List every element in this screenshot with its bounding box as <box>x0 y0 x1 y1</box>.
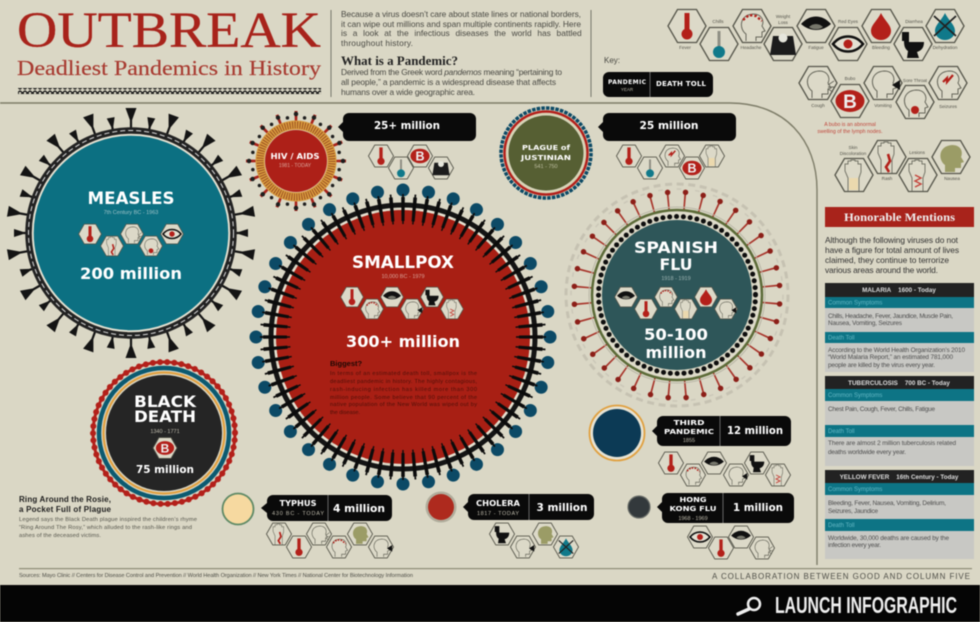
card: yellow fever: YELLOW FEVER 16th Century - Today <box>840 474 959 481</box>
virus: measles <box>7 108 255 358</box>
intro text: throughout history. <box>341 38 413 48</box>
virus: smallpox <box>256 190 550 484</box>
measles death toll: 200 million <box>80 264 182 283</box>
pill: hong kong flu: 1 million <box>733 502 783 514</box>
symptom labels: Fatigue <box>808 45 824 50</box>
smallpox note text: million people. Some believe that 90 percent of the <box>330 395 477 401</box>
smallpox heading: SMALLPOX <box>352 253 454 273</box>
black death dates: 1340 - 1771 <box>150 429 180 435</box>
symptom labels: Lesions <box>909 150 926 155</box>
subtitle: Deadliest Pandemics in History <box>17 56 322 80</box>
ornament band <box>18 88 321 94</box>
justinian symptoms <box>616 145 725 179</box>
card: malaria: According to the World Health Organization’s 2010 <box>828 347 965 354</box>
typhus symptoms <box>266 523 394 558</box>
black death heading <box>134 392 197 426</box>
black death death toll: 75 million <box>136 464 194 476</box>
key: Key: <box>604 56 620 65</box>
symptom labels: Diarrhea <box>905 19 923 24</box>
justinian heading <box>520 144 571 162</box>
icon: lesions <box>899 158 937 192</box>
justinian heading: PLAGUE of <box>522 144 571 152</box>
icon: vomiting <box>864 66 902 100</box>
key pill: DEATH TOLL <box>656 80 707 88</box>
pill: cholera: CHOLERA <box>476 499 520 508</box>
measles heading: MEASLES <box>88 189 174 209</box>
pill: hong kong flu <box>657 493 794 523</box>
symptom labels: Nausea <box>944 176 960 181</box>
honorable mentions heading <box>825 207 974 227</box>
justinian dates: 541 - 750 <box>534 164 558 170</box>
card: tuberculosis <box>825 376 974 466</box>
pill: third pandemic: 1855 <box>683 438 695 444</box>
card: malaria: Chills, Headache, Fever, Jaundice, Muscle Pain, <box>828 313 953 320</box>
smallpox note text: native population of the New World was wiped out by <box>330 402 477 408</box>
icon: bubo <box>831 84 869 118</box>
pill: cholera <box>463 494 594 520</box>
symptom labels <box>679 14 960 181</box>
card: yellow fever: Death Toll <box>828 523 855 529</box>
icon: fever <box>668 10 706 42</box>
symptom legend icons <box>668 10 970 192</box>
smallpox symptoms <box>341 287 463 319</box>
honorable mentions intro: Although the following viruses do not <box>825 235 959 245</box>
symptom labels: Skin <box>849 145 858 150</box>
virus: cholera <box>426 492 456 522</box>
icon: seizures <box>929 66 967 100</box>
icon: red eyes <box>829 28 867 60</box>
third pandemic symptoms <box>658 452 791 486</box>
intro text: is a look at the infectious diseases the world has battled <box>341 28 582 38</box>
hiv heading: HIV / AIDS <box>270 152 320 161</box>
pill: typhus <box>261 495 392 521</box>
smallpox note text: rash-inducing infection has killed more than 300 <box>330 387 477 393</box>
icon: bubo: B <box>161 441 170 455</box>
callout: ring around the rosie <box>19 495 197 539</box>
smallpox note text: deadliest pandemic in history. The highly contagious, <box>330 379 477 385</box>
card: yellow fever: infection every year. <box>828 542 881 549</box>
smallpox dates: 10,000 BC - 1979 <box>381 274 425 280</box>
symptom labels: Fever <box>679 45 691 50</box>
icon: cough <box>799 66 837 100</box>
icon: magnifier <box>738 598 760 614</box>
smallpox note text <box>330 371 477 416</box>
sources: Sources: Mayo Clinic // Centers for Disease Control and Prevention // World Health Organization // New York Times // National Center for Biotechnology Information <box>19 573 413 579</box>
pill: third pandemic: PANDEMIC <box>664 428 714 436</box>
hong kong flu symptoms <box>687 526 775 559</box>
icon: fatigue <box>797 10 835 42</box>
pill: hong kong flu: 1968 - 1969 <box>678 516 708 522</box>
callout: ring around the rosie: ashes of the deceased victims. <box>19 533 101 539</box>
honorable mentions intro: various areas around the world. <box>825 265 938 275</box>
symptom labels: Vomiting <box>874 103 892 108</box>
card: yellow fever: Seizures, Jaundice <box>828 508 878 515</box>
icon: weight loss <box>764 28 802 60</box>
callout: ring around the rosie: Ring Around the Rosie, <box>19 495 111 504</box>
honorable mentions intro <box>825 235 959 275</box>
title: OUTBREAK <box>17 3 321 59</box>
card: malaria: Nausea, Vomiting, Seizures <box>828 320 902 327</box>
death toll pill: justinian: 25 million <box>640 120 698 132</box>
bubo note: swelling of the lymph nodes. <box>817 129 883 135</box>
credit: A COLLABORATION BETWEEN GOOD AND COLUMN FIVE <box>712 572 970 581</box>
hiv symptoms: B <box>415 150 425 164</box>
definition text: Derived from the Greek word pandemos meaning “pertaining to <box>341 67 562 77</box>
intro text: Because a virus doesn’t care about state lines or national borders, <box>341 9 581 19</box>
symptom labels: Loss <box>778 20 789 25</box>
pill: hong kong flu: KONG FLU <box>670 505 717 513</box>
card: tuberculosis: Common Symptoms <box>828 393 882 399</box>
smallpox note text: the disease. <box>330 410 360 416</box>
symptom labels: Discoloration <box>840 151 867 156</box>
card: malaria <box>825 283 974 372</box>
heading: what is a pandemic: What is a Pandemic? <box>341 53 458 68</box>
pill: hong kong flu: HONG <box>680 496 707 504</box>
smallpox death toll: 300+ million <box>346 332 460 351</box>
icon: bubo: B <box>843 92 857 113</box>
symptom labels: Chills <box>712 19 724 24</box>
icon: chills <box>700 28 738 60</box>
card: tuberculosis: Death Toll <box>828 429 855 435</box>
card: tuberculosis: There are almost 2 million tuberculosis related <box>828 440 956 447</box>
icon: headache <box>733 10 771 42</box>
pill: cholera: 1817 - TODAY <box>477 511 519 517</box>
symptom labels: Sore Throat <box>903 78 928 83</box>
intro text: it can wipe out millions and span multiple continents rapidly. Here <box>341 19 581 29</box>
spanish flu death toll <box>644 325 708 362</box>
card: malaria: Death Toll <box>828 336 855 342</box>
card: tuberculosis: TUBERCULOSIS 700 BC - Today <box>848 380 950 387</box>
virus: plague of justinian <box>501 108 591 198</box>
spanish flu symptoms <box>615 287 737 319</box>
measles symptoms <box>79 224 183 256</box>
key <box>603 56 713 97</box>
pill: third pandemic: 12 million <box>727 425 783 437</box>
icon: rash <box>868 140 906 174</box>
symptom labels: Rash <box>882 176 893 181</box>
black death heading: BLACK <box>134 392 197 411</box>
smallpox note heading: Biggest? <box>330 359 363 368</box>
honorable mentions heading: Honorable Mentions <box>844 210 955 224</box>
spanish flu death toll: million <box>646 343 706 362</box>
panel: honorable mentions <box>825 207 974 559</box>
callout: ring around the rosie: a Pocket Full of Plague <box>19 505 112 514</box>
pill: third pandemic <box>652 416 791 446</box>
symptom labels: Headache <box>741 45 762 50</box>
death toll pill: justinian <box>598 113 736 141</box>
cholera symptoms <box>489 523 579 558</box>
spanish flu heading: SPANISH <box>634 238 718 257</box>
card: yellow fever: Bleeding, Fever, Nausea, Vomiting, Delirium, <box>828 500 946 507</box>
icon: diarrhea <box>894 28 932 60</box>
pill: third pandemic: THIRD <box>674 419 705 427</box>
card: malaria: “World Malaria Report,” an estimated 781,000 <box>828 354 953 361</box>
definition text <box>341 67 562 97</box>
callout: ring around the rosie: “Ring Around The Rosy,” which alluded to the rash-like rings and <box>19 525 192 531</box>
icon: skin discoloration <box>835 158 873 192</box>
card: malaria: MALARIA 1600 - Today <box>862 287 936 294</box>
virus: hiv / aids <box>249 114 343 208</box>
card: malaria: Common Symptoms <box>828 300 882 306</box>
bubo note <box>817 122 883 135</box>
symptom labels: Bubo <box>845 76 856 81</box>
virus: typhus <box>222 494 254 524</box>
card: yellow fever: Common Symptoms <box>828 487 882 493</box>
key pill <box>603 72 713 97</box>
card: tuberculosis: deaths worldwide every year. <box>828 449 906 456</box>
virus: hong kong flu <box>628 496 650 518</box>
callout: ring around the rosie: Legend says the Black Death plague inspired the children’s rhyme <box>19 517 197 523</box>
death toll pill: hiv <box>338 113 476 141</box>
smallpox note text: In terms of an estimated death toll, smallpox is the <box>330 371 477 377</box>
symptom labels: Cough <box>811 103 825 108</box>
card: yellow fever <box>825 470 974 559</box>
virus: black death <box>93 362 235 504</box>
definition text: humans over a wide geographic area. <box>341 87 475 97</box>
definition text: all people,” a pandemic is a widespread disease that affects <box>341 77 556 87</box>
death toll pill: hiv: 25+ million <box>374 120 440 132</box>
pill: cholera: 3 million <box>536 502 588 514</box>
panel outline: main content curve <box>0 103 817 565</box>
key pill: PANDEMIC <box>608 79 647 86</box>
launch bar <box>0 585 980 622</box>
spanish flu dates: 1918 - 1919 <box>661 276 691 282</box>
icon: bleeding <box>862 10 900 42</box>
intro text <box>341 9 582 48</box>
hiv dates: 1981 - TODAY <box>279 163 312 169</box>
icon: bubo <box>153 438 177 458</box>
icon: dehydration <box>926 10 964 42</box>
icon: sore throat <box>896 86 934 118</box>
measles dates: 7th Century BC - 1963 <box>104 210 158 216</box>
symptom labels: Weight <box>776 14 791 19</box>
pill: typhus: 430 BC - TODAY <box>272 511 324 517</box>
justinian symptoms: B <box>687 162 697 176</box>
virus: third pandemic <box>590 406 644 460</box>
spanish flu heading: FLU <box>660 255 692 274</box>
key pill: YEAR <box>621 87 634 92</box>
icon: nausea <box>932 140 970 174</box>
honorable mentions intro: have a figure for total amount of lives <box>825 245 959 255</box>
justinian heading: JUSTINIAN <box>520 154 571 162</box>
pill: typhus: 4 million <box>333 503 385 515</box>
spanish flu heading <box>634 238 718 274</box>
symptom labels: Dehydration <box>933 45 958 50</box>
symptom labels: Seizures <box>939 104 958 109</box>
card: yellow fever: Worldwide, 30,000 deaths are caused by the <box>828 535 949 542</box>
pill: typhus: TYPHUS <box>280 499 317 508</box>
black death heading: DEATH <box>134 407 196 426</box>
honorable mentions intro: claimed, they continue to terrorize <box>825 255 949 265</box>
card: tuberculosis: Chest Pain, Cough, Fever, Chills, Fatigue <box>828 406 935 413</box>
hiv symptoms <box>368 145 454 179</box>
symptom labels: Bleeding <box>872 45 890 50</box>
bubo note: A bubo is an abnormal <box>824 122 876 128</box>
virus: spanish flu <box>566 184 788 406</box>
card: malaria: people are killed by the virus every year. <box>828 362 935 369</box>
symptom labels: Red Eyes <box>838 19 859 24</box>
spanish flu death toll: 50-100 <box>644 325 708 344</box>
